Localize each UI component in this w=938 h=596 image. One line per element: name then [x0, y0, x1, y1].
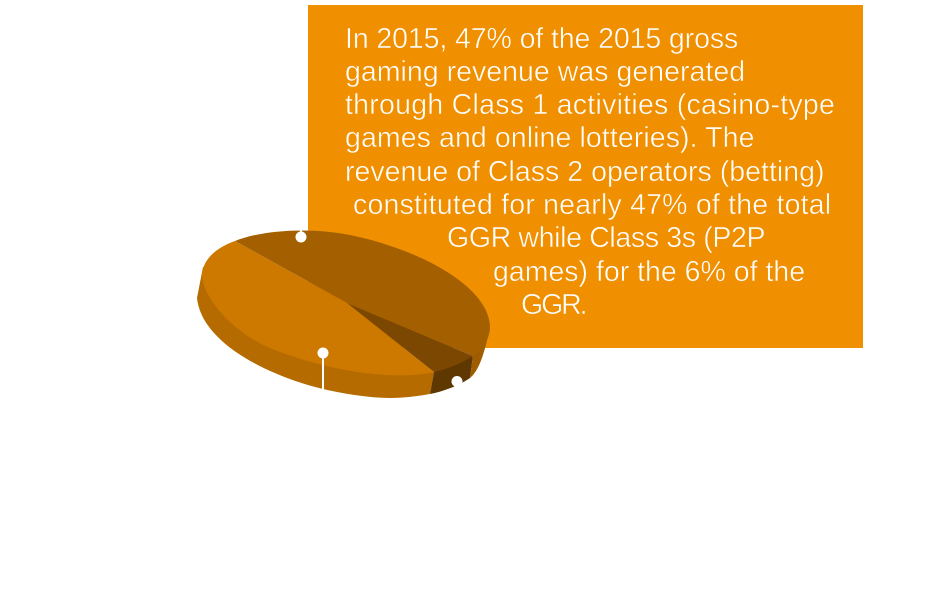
marker: class 3 — [452, 376, 462, 387]
text block: gross gaming revenue description — [345, 23, 835, 321]
text block: gross gaming revenue description: games and online lotteries). The — [345, 122, 755, 154]
text block: gross gaming revenue description: constituted for nearly 47% of the total — [353, 189, 831, 221]
marker: class 2 — [296, 230, 306, 242]
pie slice: class 1 top — [202, 241, 434, 375]
pie side wall: class 2 — [470, 328, 490, 378]
text block: gross gaming revenue description: revenue of Class 2 operators (betting) — [345, 156, 825, 188]
pie side wall: class 1 — [197, 267, 434, 398]
text block: gross gaming revenue description: through Class 1 activities (casino-type — [345, 89, 835, 121]
text block: gross gaming revenue description: games) for the 6% of the — [493, 256, 805, 288]
text block: gross gaming revenue description: In 2015, 47% of the 2015 gross — [345, 23, 738, 55]
text block: gross gaming revenue description: GGR while Class 3s (P2P — [447, 222, 765, 254]
text block: gross gaming revenue description: gaming revenue was generated — [345, 56, 745, 88]
pie side wall: class 3 — [430, 356, 473, 394]
pie slice: class 2 top — [235, 230, 490, 356]
text block: gross gaming revenue description: GGR. — [521, 289, 585, 321]
pie slice: class 3 top — [347, 303, 473, 372]
panel: orange text background — [308, 5, 863, 348]
marker: class 1 — [318, 348, 328, 390]
